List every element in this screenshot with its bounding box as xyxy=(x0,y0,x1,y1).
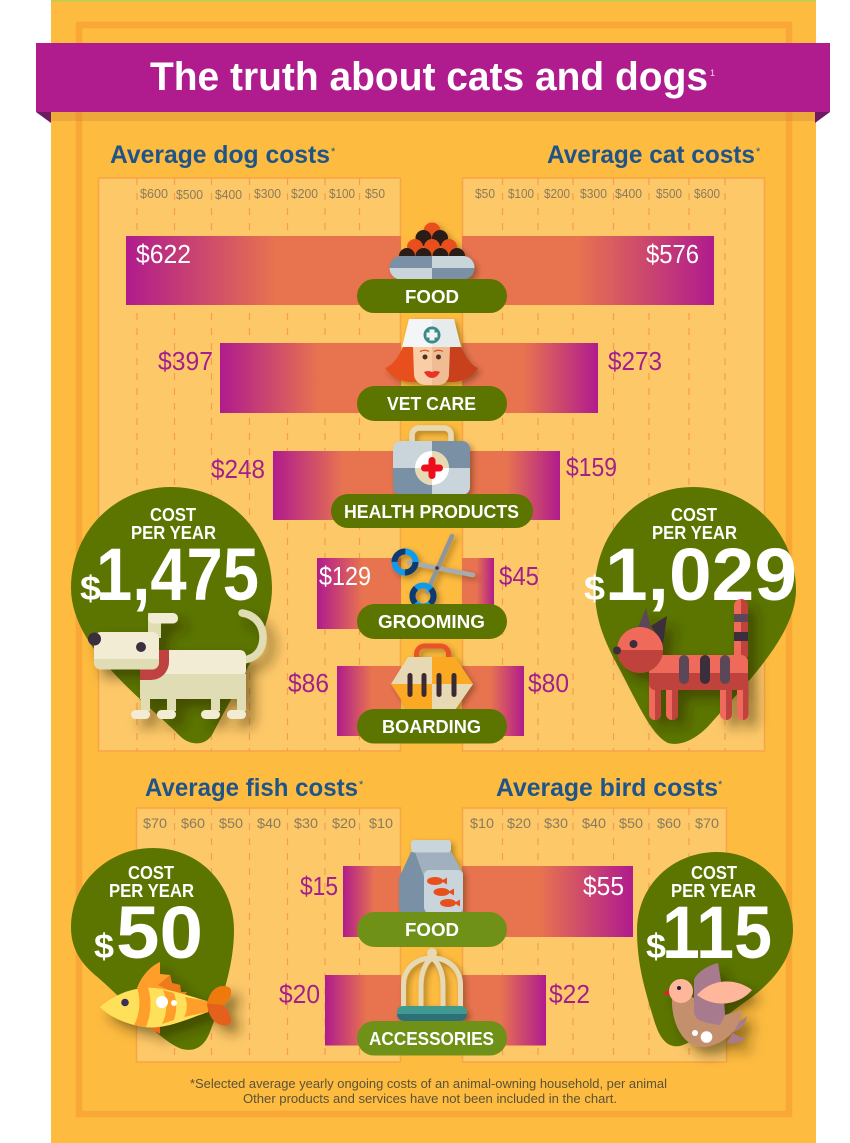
panel: fish chart grid: $40 xyxy=(257,815,281,831)
callout: bird cost per year: COST xyxy=(691,863,737,883)
callout: dog cost per year: 1,475 xyxy=(96,533,259,616)
icon: bird xyxy=(663,963,752,1047)
dog and cat values: $129 xyxy=(319,561,371,591)
callout: bird cost per year: PER YEAR xyxy=(671,881,756,901)
dog and cat values: $622 xyxy=(136,239,191,269)
heading asterisks: * xyxy=(756,146,761,158)
pill: grooming xyxy=(357,604,507,639)
pill: boarding: BOARDING xyxy=(382,717,481,737)
icon: scissors xyxy=(394,536,473,606)
panel: cat chart grid: $600 xyxy=(694,186,720,201)
heading: dog costs: Average dog costs xyxy=(110,141,330,169)
heading: bird costs: Average bird costs xyxy=(496,774,718,802)
dog and cat values xyxy=(136,239,699,698)
panel: bird chart grid: $20 xyxy=(507,815,531,831)
bars: vet care xyxy=(220,343,598,413)
icon: health kit xyxy=(393,428,470,495)
callout: bird cost per year: 115 xyxy=(662,891,772,974)
panel: cat chart grid: $50 xyxy=(475,186,495,201)
panel: bird chart grid: $70 xyxy=(695,815,719,831)
panel: dog chart grid: $100 xyxy=(329,186,355,201)
pill: food: FOOD xyxy=(405,287,459,307)
callout: cat cost per year: $ xyxy=(584,570,605,608)
callout: dog cost per year: PER YEAR xyxy=(131,523,216,543)
panel: bird chart grid xyxy=(462,808,726,1062)
icon: cat xyxy=(613,599,749,720)
panel: fish chart grid: $30 xyxy=(294,815,318,831)
pill: accessories xyxy=(357,1021,507,1056)
panel: dog chart grid: $600 xyxy=(140,186,168,201)
panel: cat chart grid: $100 xyxy=(508,186,534,201)
panel: fish chart grid: $70 xyxy=(143,815,167,831)
fish and bird values: $20 xyxy=(279,979,320,1009)
bars: health products xyxy=(273,451,560,520)
panel: dog chart grid: $500 xyxy=(176,187,203,202)
fish and bird values: $22 xyxy=(549,979,590,1009)
callout: fish cost per year: 50 xyxy=(116,891,203,974)
title banner xyxy=(36,43,830,123)
callout: bird cost per year xyxy=(637,852,793,1046)
icon: fish food bag xyxy=(399,840,463,912)
pill: boarding xyxy=(357,709,507,744)
icon: dog xyxy=(88,613,263,719)
panel: dog chart grid xyxy=(98,178,400,751)
panel: dog chart grid: $50 xyxy=(365,186,385,201)
dog and cat values: $397 xyxy=(158,346,213,376)
dog and cat values: $248 xyxy=(211,454,265,484)
callout: fish cost per year: COST xyxy=(128,863,174,883)
icon: food bowl xyxy=(390,222,474,280)
heading asterisks: * xyxy=(718,779,723,791)
panel: cat chart grid: $400 xyxy=(615,186,642,201)
callout: cat cost per year xyxy=(584,487,797,744)
dog and cat values: $80 xyxy=(528,668,569,698)
pill: fish and bird food: FOOD xyxy=(405,920,459,940)
bars: food xyxy=(126,236,714,305)
title banner: The truth about cats and dogs xyxy=(150,55,708,99)
bars: fish and bird food xyxy=(343,866,633,937)
callout: cat cost per year: PER YEAR xyxy=(652,523,737,543)
footnote: Other products and services have not been included in the chart. xyxy=(243,1092,617,1106)
panel: bird chart grid: $50 xyxy=(619,815,643,831)
callout: bird cost per year: $ xyxy=(646,928,666,966)
callout: cat cost per year: COST xyxy=(671,505,717,525)
panel: cat chart grid xyxy=(462,178,764,751)
icon: pet carrier xyxy=(391,646,473,710)
pill: vet care xyxy=(357,386,507,421)
callout: dog cost per year: $ xyxy=(80,570,101,608)
icon: fish xyxy=(100,962,231,1034)
dog and cat values: $86 xyxy=(288,668,329,698)
icon: vet nurse xyxy=(385,319,478,385)
pill: accessories: ACCESSORIES xyxy=(369,1029,494,1049)
bars: fish and bird accessories xyxy=(325,975,546,1046)
pill: fish and bird food xyxy=(357,912,507,947)
panel: cat chart grid: $500 xyxy=(656,186,682,201)
dog and cat values: $159 xyxy=(566,452,617,482)
fish and bird values xyxy=(279,871,624,1009)
heading asterisks: * xyxy=(331,146,336,158)
panel: fish chart grid xyxy=(136,808,400,1062)
dog and cat values: $45 xyxy=(499,561,539,591)
icon: bird cage xyxy=(397,948,467,1021)
pill: grooming: GROOMING xyxy=(378,612,485,632)
pill: food xyxy=(357,279,507,313)
panel: fish chart grid: $10 xyxy=(369,815,393,831)
bars: grooming xyxy=(317,558,494,629)
panel: bird chart grid: $30 xyxy=(544,815,568,831)
title banner: 1 xyxy=(710,68,715,78)
panel: fish chart grid: $20 xyxy=(332,815,356,831)
callout: dog cost per year: COST xyxy=(150,505,196,525)
callout: fish cost per year xyxy=(71,848,234,1050)
callout: fish cost per year: PER YEAR xyxy=(109,881,194,901)
callout: dog cost per year xyxy=(71,487,272,743)
panel: cat chart grid: $200 xyxy=(544,186,570,201)
dog and cat values: $576 xyxy=(646,239,699,269)
callout: cat cost per year: 1,029 xyxy=(605,533,797,616)
fish and bird values: $15 xyxy=(300,871,338,901)
panel: bird chart grid: $40 xyxy=(582,815,606,831)
heading: cat costs: Average cat costs xyxy=(547,141,755,169)
heading asterisks xyxy=(331,146,761,791)
bars: boarding xyxy=(337,666,524,736)
dog and cat values: $273 xyxy=(608,346,662,376)
fish and bird values: $55 xyxy=(583,871,624,901)
panel: dog chart grid: $300 xyxy=(254,186,281,201)
panel: cat chart grid: $300 xyxy=(580,186,607,201)
panel: dog chart grid: $200 xyxy=(291,186,318,201)
panel: bird chart grid: $10 xyxy=(470,815,494,831)
pill: health products: HEALTH PRODUCTS xyxy=(344,502,519,522)
panel: bird chart grid: $60 xyxy=(657,815,681,831)
heading: fish costs: Average fish costs xyxy=(145,774,358,802)
callout: fish cost per year: $ xyxy=(94,928,114,966)
pill: vet care: VET CARE xyxy=(387,394,476,414)
footnote: *Selected average yearly ongoing costs of an animal-owning household, per animal xyxy=(190,1077,667,1091)
panel: dog chart grid: $400 xyxy=(215,187,242,202)
panel: fish chart grid: $50 xyxy=(219,815,243,831)
footnote xyxy=(190,1077,667,1106)
pill: health products xyxy=(331,494,533,528)
panel: fish chart grid: $60 xyxy=(181,815,205,831)
heading asterisks: * xyxy=(359,779,364,791)
